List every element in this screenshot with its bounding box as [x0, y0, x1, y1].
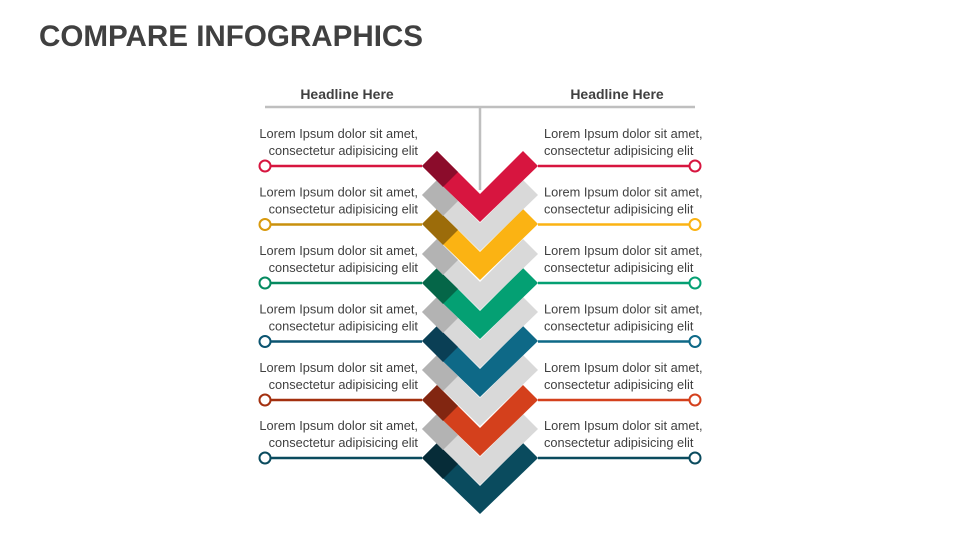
gray chevron 4	[422, 355, 538, 426]
chevron 1 red	[422, 151, 538, 222]
title: COMPARE INFOGRAPHICS	[39, 20, 423, 53]
row 6: Lorem Ipsum dolor sit amet,	[259, 418, 418, 433]
row 5	[259, 360, 703, 406]
row 4: consectetur adipisicing elit	[544, 318, 694, 334]
row 4: Lorem Ipsum dolor sit amet,	[544, 302, 703, 316]
row 5: consectetur adipisicing elit	[544, 377, 694, 392]
row 4: Lorem Ipsum dolor sit amet,	[259, 302, 418, 316]
row 2: Lorem Ipsum dolor sit amet,	[259, 184, 418, 200]
row 6: consectetur adipisicing elit	[269, 435, 418, 450]
gray chevron 3	[422, 297, 538, 368]
row 1: Lorem Ipsum dolor sit amet,	[259, 126, 418, 141]
row 5: consectetur adipisicing elit	[269, 377, 418, 392]
row 2	[259, 184, 703, 230]
row 4	[259, 302, 703, 347]
row 5: Lorem Ipsum dolor sit amet,	[544, 360, 703, 375]
chevron 4 blue	[422, 326, 538, 397]
chevron stack	[422, 151, 538, 514]
row 3: consectetur adipisicing elit	[544, 260, 694, 275]
row 2: consectetur adipisicing elit	[269, 202, 418, 216]
chevron 6 teal	[422, 443, 538, 514]
row 4: consectetur adipisicing elit	[269, 318, 418, 334]
gray chevron 5	[422, 414, 538, 485]
headline right: Headline Here	[570, 86, 664, 102]
row 1	[259, 126, 703, 172]
row 3: Lorem Ipsum dolor sit amet,	[259, 243, 418, 258]
chevron 2 yellow	[422, 209, 538, 280]
row 6	[259, 418, 703, 464]
row 3: Lorem Ipsum dolor sit amet,	[544, 243, 703, 258]
row 1: Lorem Ipsum dolor sit amet,	[544, 126, 703, 141]
row 3: consectetur adipisicing elit	[269, 260, 418, 275]
headline left: Headline Here	[300, 86, 394, 102]
gray chevron 2	[422, 239, 538, 310]
chevron 3 green	[422, 268, 538, 339]
row 6: consectetur adipisicing elit	[544, 435, 694, 450]
header divider	[265, 107, 695, 190]
chevron 5 orange	[422, 385, 538, 456]
row 5: Lorem Ipsum dolor sit amet,	[259, 360, 418, 375]
row 3	[259, 243, 703, 288]
row 2: Lorem Ipsum dolor sit amet,	[544, 184, 703, 200]
gray chevron 1	[422, 180, 538, 251]
row 2: consectetur adipisicing elit	[544, 202, 694, 216]
row 1: consectetur adipisicing elit	[544, 143, 694, 158]
row 6: Lorem Ipsum dolor sit amet,	[544, 418, 703, 433]
row 1: consectetur adipisicing elit	[269, 143, 418, 158]
